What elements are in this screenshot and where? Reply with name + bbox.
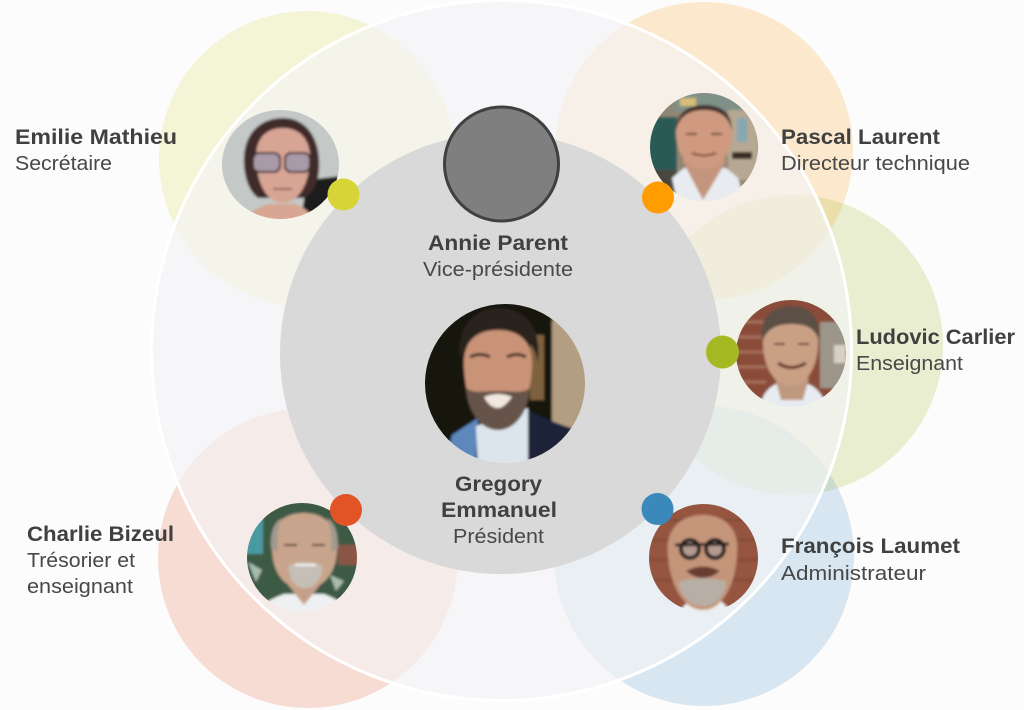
circle: large outer ring (152, 0, 852, 700)
circle: orange halo (555, 2, 853, 300)
label: Gregory Emmanuel: Président (453, 526, 544, 548)
label: Gregory Emmanuel: Emmanuel (441, 499, 557, 522)
label: Annie Parent: Vice-présidente (423, 259, 573, 281)
dot: Emilie yellow (328, 178, 360, 210)
label: Charlie Bizeul: Trésorier et (27, 550, 135, 572)
label: Charlie Bizeul (27, 523, 174, 598)
photo: Annie Parent placeholder (444, 107, 558, 221)
label: François Laumet: François Laumet (781, 535, 960, 558)
dot: Pascal orange (642, 182, 674, 214)
dot: Ludovic green (706, 336, 739, 368)
label: François Laumet: Administrateur (781, 563, 926, 585)
photo: Charlie Bizeul (247, 503, 357, 606)
label: Emilie Mathieu (15, 126, 177, 175)
photo: Pascal Laurent (650, 93, 758, 201)
dot: Charlie red (330, 494, 362, 526)
circle: green halo (643, 195, 943, 495)
label: Emilie Mathieu: Emilie Mathieu (15, 126, 177, 149)
label: Pascal Laurent (781, 126, 970, 175)
circle: inner grey disc (280, 133, 721, 574)
label: Annie Parent: Annie Parent (428, 232, 568, 255)
label: Pascal Laurent: Pascal Laurent (781, 126, 940, 149)
circle: blue halo (554, 406, 854, 706)
photo: Gregory Emmanuel (425, 304, 585, 463)
dot: François blue (642, 493, 674, 525)
label: Ludovic Carlier: Enseignant (856, 353, 963, 375)
label: Pascal Laurent: Directeur technique (781, 153, 970, 175)
label: Gregory Emmanuel (441, 473, 557, 548)
label: François Laumet (781, 535, 960, 585)
label: Annie Parent (423, 232, 573, 281)
photo: François Laumet (649, 504, 758, 612)
photo: Ludovic Carlier (736, 300, 846, 402)
label: Emilie Mathieu: Secrétaire (15, 153, 112, 175)
circle: red halo (158, 408, 458, 708)
photo: Emilie Mathieu (222, 110, 339, 219)
label: Ludovic Carlier (856, 326, 1015, 375)
label: Charlie Bizeul: Charlie Bizeul (27, 523, 174, 546)
label: Gregory Emmanuel: Gregory (455, 473, 542, 496)
label: Charlie Bizeul: enseignant (27, 576, 133, 598)
circle: yellow halo (159, 11, 455, 307)
label: Ludovic Carlier: Ludovic Carlier (856, 326, 1015, 349)
